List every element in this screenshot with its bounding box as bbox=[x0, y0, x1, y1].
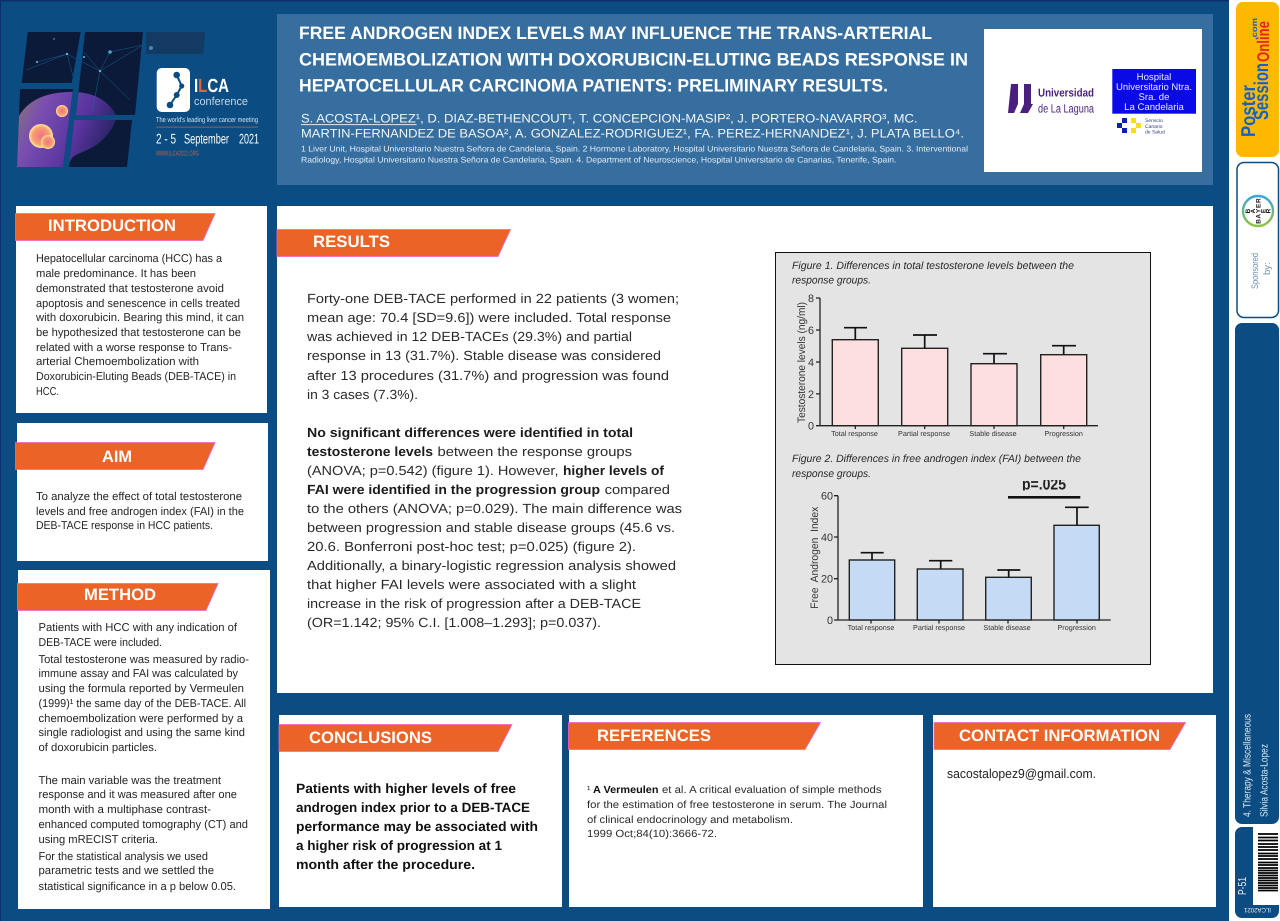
panel: method bbox=[18, 570, 270, 909]
heading: results bbox=[277, 230, 510, 256]
heading: results: RESULTS bbox=[313, 233, 390, 251]
results text: increase in the risk of progression after a DEB-TACE bbox=[307, 596, 641, 611]
method text: chemoembolization were performed by a bbox=[38, 713, 244, 725]
code label: ILCA2021 bbox=[1244, 906, 1271, 913]
introduction text: demonstrated that testosterone avoid bbox=[36, 283, 224, 295]
conclusions text: month after the procedure. bbox=[296, 857, 475, 872]
logo: Servicio Canario de Salud: de Salud bbox=[1145, 130, 1165, 136]
bar chart: testosterone levels: 2 bbox=[808, 389, 814, 401]
icon: Bayer logo: Y bbox=[1255, 208, 1262, 213]
results text bbox=[306, 291, 682, 630]
panel: results bbox=[277, 206, 1213, 693]
logo: Universidad de La Laguna: de La Laguna bbox=[1038, 102, 1094, 116]
method text: Total testosterone was measured by radio- bbox=[38, 654, 249, 666]
barcode bbox=[1258, 834, 1278, 890]
icon: Bayer logo: E bbox=[1260, 208, 1268, 213]
icon: Bayer logo: R bbox=[1255, 198, 1262, 203]
bar chart: testosterone levels: Progression bbox=[1045, 429, 1083, 438]
tab: session and author: Silvia Acosta-Lopez bbox=[1258, 744, 1270, 817]
panel: references bbox=[568, 715, 923, 907]
aim text: To analyze the effect of total testosterone bbox=[36, 491, 242, 503]
tab: Poster Session Online: Poster bbox=[1238, 85, 1260, 137]
tab: Poster Session Online bbox=[1236, 2, 1279, 157]
logo: Universidad de La Laguna: Universidad bbox=[1038, 88, 1094, 100]
bar chart: free androgen index: Stable disease bbox=[983, 623, 1031, 632]
panel: introduction bbox=[16, 206, 267, 413]
heading: references bbox=[568, 722, 820, 750]
reference text: A Vermeulen bbox=[593, 785, 658, 796]
caption: figure 2 bbox=[792, 453, 1081, 480]
results text: 20.6. Bonferroni post-hoc test; p=0.025) (figure 2). bbox=[307, 539, 636, 554]
reference text: 1999 Oct;84(10):3666-72. bbox=[587, 829, 717, 840]
logo: Servicio Canario de Salud bbox=[1117, 118, 1165, 136]
contact email: sacostalopez9@gmail.com. bbox=[947, 766, 1096, 781]
method text: The main variable was the treatment bbox=[38, 775, 222, 787]
title bbox=[299, 23, 968, 96]
website: WWW.ILCA2021.ORG bbox=[156, 151, 199, 158]
aim text: DEB-TACE response in HCC patients. bbox=[36, 520, 213, 532]
icon: Bayer logo bbox=[1243, 196, 1273, 226]
bar chart: testosterone levels bbox=[796, 293, 1098, 438]
header panel bbox=[277, 14, 1213, 185]
method text: immune assay and FAI was calculated by bbox=[38, 668, 238, 680]
results text: compared bbox=[605, 482, 670, 497]
logos panel bbox=[984, 29, 1202, 172]
icon: Bayer logo: E bbox=[1255, 203, 1262, 208]
method text: Patients with HCC with any indication of bbox=[38, 622, 238, 634]
results text: Forty-one DEB-TACE performed in 22 patients (3 women; bbox=[307, 291, 679, 306]
dates bbox=[156, 131, 259, 147]
logo: Hospital Candelaria bbox=[1112, 69, 1196, 114]
results text: to the others (ANOVA; p=0.029). The main difference was bbox=[307, 501, 682, 516]
method text: of doxorubicin particles. bbox=[38, 742, 157, 754]
results text: that higher FAI levels were associated with a slight bbox=[307, 577, 636, 592]
introduction text: related with a worse response to Trans- bbox=[36, 342, 232, 354]
tab: Poster Session Online: Session bbox=[1251, 63, 1273, 120]
reference text: ¹ bbox=[587, 785, 591, 796]
bar chart: testosterone levels: 6 bbox=[808, 325, 814, 337]
title: FREE ANDROGEN INDEX LEVELS MAY INFLUENCE THE TRANS-ARTERIAL bbox=[299, 23, 932, 43]
logo: Hospital Candelaria: Hospital bbox=[1137, 72, 1171, 83]
method text: (1999)¹ the same day of the DEB-TACE. All bbox=[38, 698, 246, 710]
results text: was achieved in 12 DEB-TACEs (29.3%) and partial bbox=[306, 329, 632, 344]
icon: Bayer logo: R bbox=[1266, 208, 1273, 213]
introduction text: with doxorubicin. Bearing this mind, it can bbox=[35, 312, 244, 324]
results text: FAI were identified in the progression group bbox=[307, 482, 600, 497]
title: CHEMOEMBOLIZATION WITH DOXORUBICIN-ELUTING BEADS RESPONSE IN bbox=[299, 50, 968, 70]
logo: Servicio Canario de Salud: Canario bbox=[1145, 124, 1163, 130]
panel: conclusions bbox=[279, 715, 562, 907]
introduction text: apoptosis and senescence in cells treated bbox=[36, 298, 240, 310]
caption: figure 2: response groups. bbox=[792, 468, 871, 480]
conclusions text: Patients with higher levels of free bbox=[296, 781, 516, 796]
affiliations: 1 Liver Unit, Hospital Universitario Nuestra Señora de Candelaria, Spain. 2 Hormone Laboratory, Hospital Universitario Nuestra Señora de Candelaria, Spain. 3. Interventional bbox=[301, 145, 968, 154]
method text: using mRECIST criteria. bbox=[38, 834, 158, 846]
aim text: levels and free androgen index (FAI) in the bbox=[36, 506, 244, 518]
bar chart: testosterone levels: Testosterone levels (ng/ml) bbox=[796, 302, 808, 423]
dates: September bbox=[184, 131, 229, 147]
logo: Hospital Candelaria: Sra. de bbox=[1139, 92, 1169, 103]
authors bbox=[301, 112, 964, 141]
heading: conclusions: CONCLUSIONS bbox=[309, 729, 432, 747]
title: HEPATOCELLULAR CARCINOMA PATIENTS: PRELIMINARY RESULTS. bbox=[299, 76, 888, 96]
icon: Bayer logo: B bbox=[1255, 219, 1262, 224]
conclusions text: androgen index prior to a DEB-TACE bbox=[296, 800, 530, 815]
bar chart: testosterone levels: Stable disease bbox=[969, 429, 1017, 438]
bar chart: free androgen index: 60 bbox=[821, 490, 833, 502]
tab: session and author bbox=[1235, 323, 1279, 824]
results text: response in 13 (31.7%). Stable disease was considered bbox=[307, 348, 661, 363]
results text: after 13 procedures (31.7%) and progression was found bbox=[307, 368, 669, 383]
caption: figure 1 bbox=[792, 260, 1074, 286]
bar chart: free androgen index: 20 bbox=[821, 574, 833, 586]
bar chart: testosterone levels: 8 bbox=[808, 293, 814, 305]
results text: mean age: 70.4 [SD=9.6]) were included. Total response bbox=[307, 310, 671, 325]
panel: figures bbox=[776, 252, 1150, 664]
heading: introduction: INTRODUCTION bbox=[48, 217, 176, 235]
affiliations: Radiology, Hospital Universitario Nuestra Señora de Candelaria, Spain. 4. Department of Neuroscience, Hospital Universitario de Canarias, Tenerife, Spain. bbox=[301, 156, 896, 165]
tagline: The world's leading liver cancer meeting bbox=[156, 115, 258, 124]
bar chart: free androgen index bbox=[809, 476, 1111, 632]
ILCA wordmark: ILCA bbox=[194, 76, 229, 97]
method text bbox=[38, 622, 249, 893]
method text: enhanced computed tomography (CT) and bbox=[38, 819, 248, 831]
heading: contact information bbox=[934, 722, 1186, 750]
heading: aim: AIM bbox=[102, 448, 132, 466]
results text: No significant differences were identified in total bbox=[307, 425, 633, 440]
significance bracket: p=.025 bbox=[1022, 476, 1066, 493]
authors: MARTIN-FERNANDEZ DE BASOA², A. GONZALEZ-RODRIGUEZ¹, FA. PEREZ-HERNANDEZ¹, J. PLATA BELLO⁴. bbox=[301, 127, 964, 141]
results text: between the response groups bbox=[438, 444, 632, 459]
method text: using the formula reported by Vermeulen bbox=[38, 683, 244, 695]
affiliations bbox=[301, 145, 968, 165]
sponsor label: Sponsored bbox=[1250, 253, 1261, 289]
results text: higher levels of bbox=[563, 463, 665, 478]
heading: method: METHOD bbox=[84, 586, 156, 604]
introduction text: be hypothesized that testosterone can be bbox=[36, 327, 241, 339]
results text: Additionally, a binary-logistic regression analysis showed bbox=[307, 558, 676, 573]
heading: conclusions bbox=[279, 724, 512, 752]
bar chart: testosterone levels: Total response bbox=[831, 429, 878, 438]
bar chart: free androgen index: Progression bbox=[1058, 623, 1096, 632]
reference text: et al. A critical evaluation of simple methods bbox=[662, 785, 882, 796]
results text: in 3 cases (7.3%). bbox=[307, 387, 418, 402]
caption: figure 1: Figure 1. Differences in total testosterone levels between the bbox=[792, 260, 1074, 272]
reference text bbox=[587, 785, 887, 840]
authors: S. ACOSTA-LOPEZ¹, D. DIAZ-BETHENCOUT¹, T. CONCEPCION-MASIP², J. PORTERO-NAVARRO³, MC. bbox=[301, 112, 918, 126]
bar chart: free androgen index: Partial response bbox=[913, 623, 965, 632]
reference text: of clinical endocrinology and metabolism. bbox=[587, 815, 793, 826]
aim text bbox=[36, 491, 244, 532]
conclusions text bbox=[296, 781, 538, 872]
heading: method bbox=[18, 584, 218, 610]
conclusions text: performance may be associated with bbox=[296, 819, 538, 834]
results text: testosterone levels bbox=[307, 444, 433, 459]
results text: between progression and stable disease groups (45.6 vs. bbox=[307, 520, 675, 535]
bar chart: free androgen index: Total response bbox=[848, 623, 894, 632]
logo: Universidad de La Laguna bbox=[1008, 84, 1094, 116]
logo: Hospital Candelaria: La Candelaria bbox=[1124, 102, 1185, 113]
bar chart: testosterone levels: Partial response bbox=[898, 429, 950, 438]
introduction text: Doxorubicin-Eluting Beads (DEB-TACE) in bbox=[36, 371, 236, 383]
introduction text bbox=[35, 253, 244, 398]
method text: response and it was measured after one bbox=[38, 789, 237, 801]
icon: Bayer logo: A bbox=[1255, 214, 1262, 219]
panel: contact information bbox=[933, 715, 1216, 907]
tab: poster id and barcode: P-51 bbox=[1237, 877, 1249, 895]
sidebar bbox=[1229, 0, 1280, 921]
bar chart: testosterone levels: 0 bbox=[808, 420, 814, 432]
tab: poster id and barcode bbox=[1235, 827, 1280, 918]
results text: (OR=1.142; 95% C.I. [1.008–1.293]; p=0.037). bbox=[307, 615, 601, 630]
heading: aim bbox=[16, 442, 215, 470]
introduction text: HCC. bbox=[36, 386, 59, 398]
significance bracket bbox=[1008, 480, 1080, 499]
sponsor label bbox=[1250, 253, 1273, 289]
dates: 2 - 5 bbox=[156, 131, 176, 147]
method text: parametric tests and we settled the bbox=[38, 865, 214, 877]
icon: Bayer logo: B bbox=[1245, 208, 1252, 213]
method text: DEB-TACE were included. bbox=[38, 637, 162, 649]
icon: Bayer logo: A bbox=[1250, 208, 1257, 213]
results text: (ANOVA; p=0.542) (figure 1). However, bbox=[307, 463, 558, 478]
introduction text: male predominance. It has been bbox=[36, 268, 196, 280]
method text: month with a multiphase contrast- bbox=[38, 804, 211, 816]
conference word: conference bbox=[194, 96, 248, 108]
introduction text: arterial Chemoembolization with bbox=[36, 356, 199, 368]
caption: figure 1: response groups. bbox=[792, 274, 871, 286]
image collage: liver and network bbox=[15, 30, 207, 170]
bar chart: testosterone levels: 4 bbox=[808, 357, 814, 369]
dates: 2021 bbox=[239, 131, 259, 147]
tab: Poster Session Online: .com bbox=[1250, 18, 1259, 40]
conclusions text: a higher risk of progression at 1 bbox=[296, 838, 503, 853]
bar chart: free androgen index: 40 bbox=[821, 532, 833, 544]
sponsor label: by: bbox=[1262, 262, 1273, 275]
bar chart: free androgen index: 0 bbox=[827, 615, 833, 627]
reference text: for the estimation of free testosterone in serum. The Journal bbox=[587, 800, 887, 811]
ILCA mark bbox=[157, 68, 190, 112]
heading: introduction bbox=[16, 214, 215, 240]
panel: aim bbox=[16, 423, 268, 561]
method text: statistical significance in a p below 0.05. bbox=[38, 881, 236, 893]
heading: contact information: CONTACT INFORMATION bbox=[959, 727, 1160, 745]
bar chart: free androgen index: Free Androgen Index bbox=[809, 506, 821, 609]
logo: Hospital Candelaria: Universitario Ntra. bbox=[1116, 82, 1192, 93]
caption: figure 2: Figure 2. Differences in free androgen index (FAI) between the bbox=[792, 453, 1081, 465]
method text: single radiologist and using the same kind bbox=[38, 727, 245, 739]
tab: Poster Session Online: Online bbox=[1254, 21, 1273, 62]
method text: For the statistical analysis we used bbox=[38, 851, 208, 863]
tab: session and author: 4. Therapy & Miscellaneous bbox=[1242, 714, 1254, 817]
logo: Servicio Canario de Salud: Servicio bbox=[1145, 118, 1163, 124]
conference logo bbox=[15, 30, 259, 170]
introduction text: Hepatocellular carcinoma (HCC) has a bbox=[36, 253, 223, 265]
heading: references: REFERENCES bbox=[597, 727, 711, 745]
tab: sponsor bbox=[1237, 162, 1278, 318]
